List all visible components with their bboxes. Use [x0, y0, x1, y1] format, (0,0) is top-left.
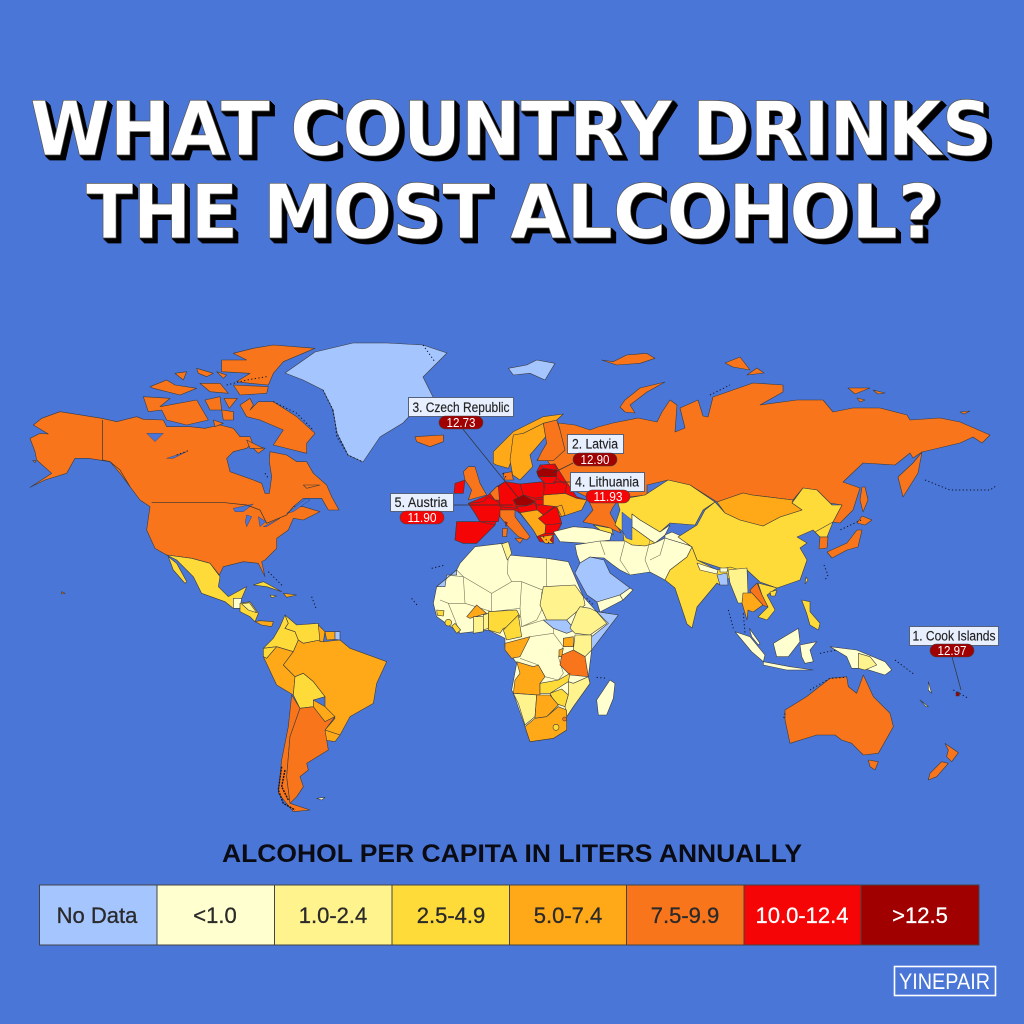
- callout: Cook Islands: [910, 626, 998, 690]
- legend heading: ALCOHOL PER CAPITA IN LITERS ANNUALLY: [222, 840, 802, 868]
- callout: Czech Republic: 12.73: [446, 416, 476, 430]
- legend: 7.5-9.9: [626, 885, 744, 945]
- legend: 1.0-2.4: 1.0-2.4: [299, 903, 367, 928]
- legend: over 12.5: [861, 885, 979, 945]
- south america: [240, 598, 418, 812]
- legend: 2.5-4.9: 2.5-4.9: [417, 903, 485, 928]
- title: COUNTRY: [290, 85, 674, 173]
- title: [30, 85, 992, 256]
- legend: under 1.0: <1.0: [193, 903, 237, 928]
- legend: [40, 885, 979, 945]
- callout: Lithuania: 4. Lithuania: [575, 474, 639, 490]
- continental europe base: [455, 464, 587, 543]
- legend: 5.0-7.4: 5.0-7.4: [534, 903, 602, 928]
- africa: [432, 542, 618, 742]
- mexico and caribbean: [167, 555, 247, 608]
- southeast asia and oceania: [728, 600, 968, 780]
- legend: no data: No Data: [57, 903, 138, 928]
- legend: 5.0-7.4: [510, 885, 626, 945]
- russia: [537, 383, 990, 533]
- title: MOST: [263, 168, 490, 256]
- europe and arctic islands: [415, 353, 655, 544]
- central asia and middle east: [615, 480, 715, 532]
- callout: Cook Islands: 12.97: [938, 644, 967, 658]
- callout: Austria: [390, 494, 513, 525]
- legend: 2.5-4.9: [392, 885, 510, 945]
- callout: Czech Republic: 3. Czech Republic: [412, 400, 510, 415]
- callout: Czech Republic: [408, 398, 520, 500]
- callout: Latvia: [553, 434, 624, 473]
- callout: Lithuania: [553, 472, 644, 504]
- legend: under 1.0: [157, 885, 274, 945]
- callout: Austria: 5. Austria: [394, 495, 448, 510]
- title: DRINKS: [692, 85, 992, 173]
- title: ALCOHOL?: [510, 168, 940, 256]
- legend: 10.0-12.4: 10.0-12.4: [756, 903, 848, 928]
- greenland: [285, 343, 447, 462]
- callout: Cook Islands: 1. Cook Islands: [912, 628, 996, 644]
- african borders: [440, 555, 563, 680]
- callout: Latvia: 12.90: [580, 453, 610, 467]
- title: WHAT: [30, 85, 270, 173]
- legend: 1.0-2.4: [274, 885, 392, 945]
- east asia: [678, 488, 842, 588]
- callout: Latvia: 2. Latvia: [572, 436, 618, 452]
- legend: 10.0-12.4: [744, 885, 861, 945]
- world map: [30, 343, 996, 812]
- caspian sea: [622, 512, 632, 540]
- callout: Austria: 11.90: [408, 511, 437, 525]
- legend: 7.5-9.9: 7.5-9.9: [651, 903, 719, 928]
- lakes: [147, 433, 310, 527]
- logo: YINEPAIR: [899, 969, 990, 994]
- legend: over 12.5: >12.5: [892, 903, 948, 928]
- title: THE: [86, 168, 238, 256]
- legend: no data: [40, 885, 157, 945]
- callout: Lithuania: 11.93: [594, 490, 623, 504]
- north america: [30, 345, 348, 610]
